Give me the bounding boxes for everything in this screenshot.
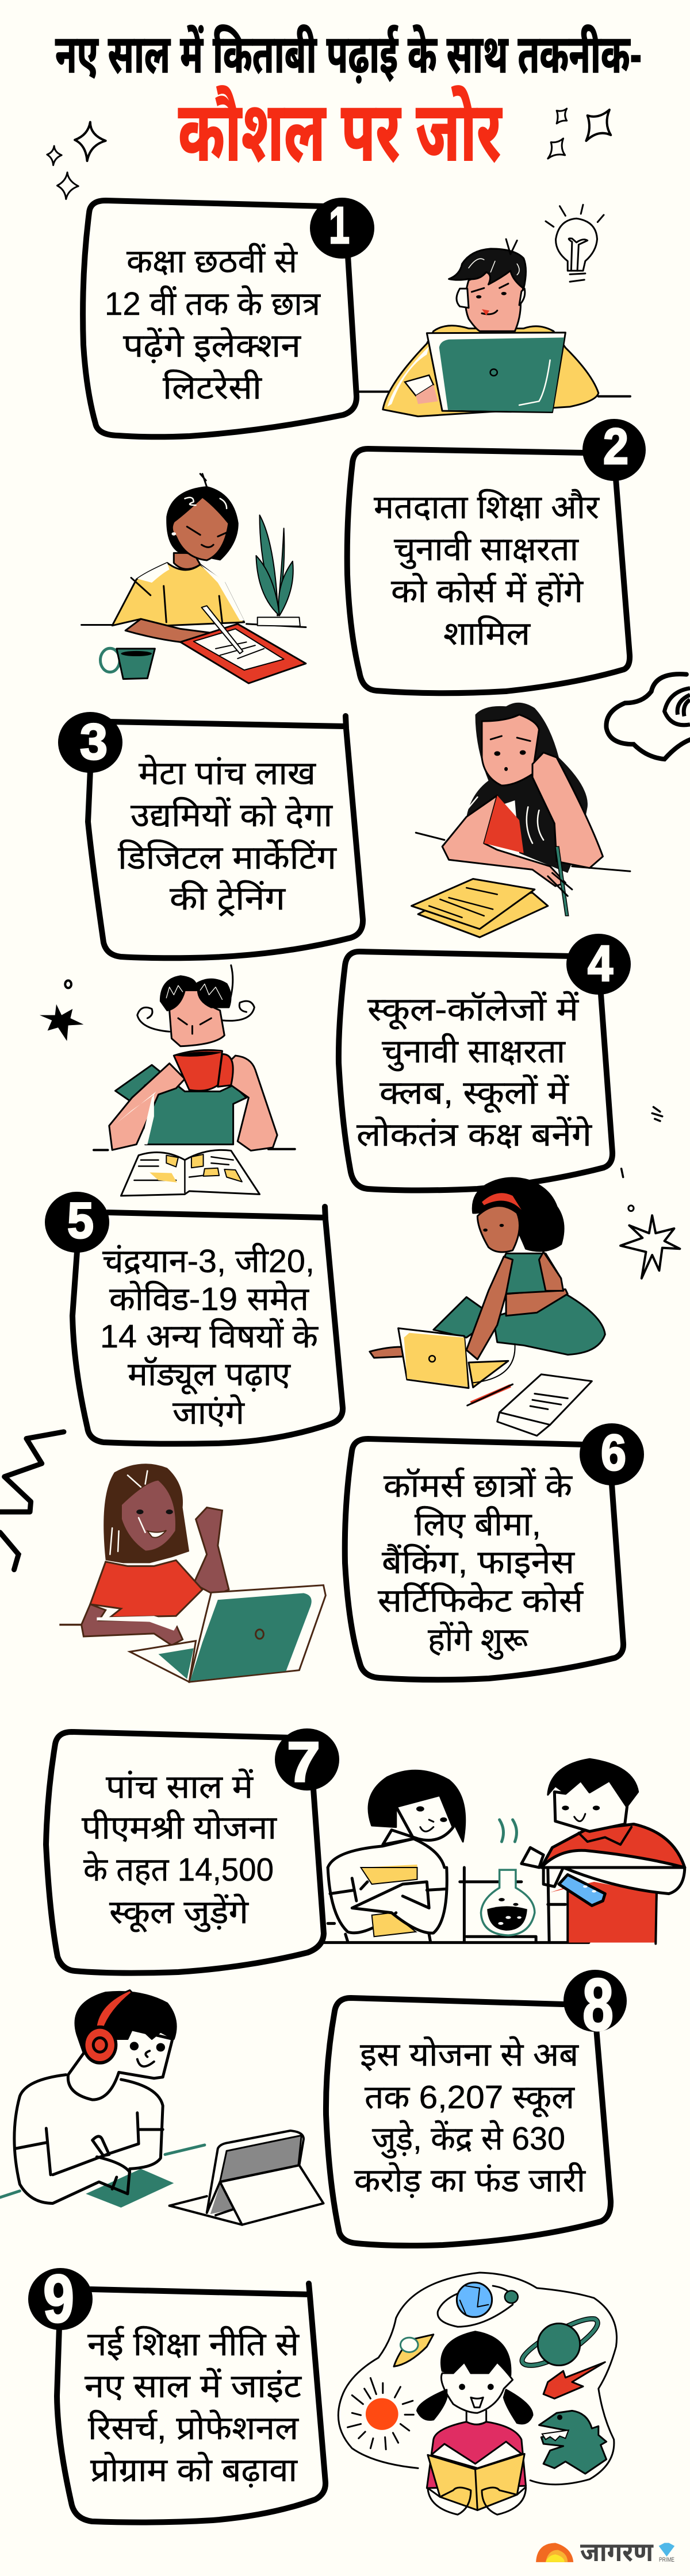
icon: sun <box>348 2378 413 2450</box>
icon: dinosaur <box>539 2411 607 2474</box>
card 1 text: पढ़ेंगे इलेक्शन <box>123 327 301 364</box>
illustration: girl raising hand with green laptop <box>59 1464 325 1682</box>
card 6 text: लिए बीमा, <box>415 1505 541 1543</box>
card 5 text: मॉड्यूल पढ़ाए <box>128 1356 292 1395</box>
card 9 text: रिसर्च, प्रोफेशनल <box>88 2409 299 2447</box>
card 3 text <box>118 754 337 917</box>
illustration: woman thinking with papers <box>412 703 630 937</box>
number badge 6: 6 <box>601 1424 626 1481</box>
panel: card 3 <box>58 712 363 958</box>
decorative sparkles right <box>548 109 611 159</box>
card 2 text: मतदाता शिक्षा और <box>374 488 600 526</box>
card 8 text: तक 6,207 स्कूल <box>365 2079 575 2118</box>
card 9 text: नए साल में जाइंट <box>85 2367 302 2405</box>
title <box>55 25 642 178</box>
card 3 text: डिजिटल मार्केटिंग <box>118 839 337 876</box>
icon: green laptop <box>130 1585 325 1682</box>
card 4 text: लोकतंत्र कक्ष बनेंगे <box>356 1116 592 1153</box>
card 5 text: कोविड-19 समेत <box>109 1280 310 1318</box>
number badge 9: 9 <box>43 2261 74 2337</box>
card 3 text: मेटा पांच लाख <box>139 754 316 792</box>
number badge 6 <box>580 1423 644 1485</box>
icon: test tube <box>559 1874 605 1905</box>
illustration: woman writing on tablet with plant and cup <box>82 474 306 683</box>
card 5 text: चंद्रयान-3, जी20, <box>102 1242 315 1280</box>
card 4 text: चुनावी साक्षरता <box>382 1033 566 1072</box>
title line 2: कौशल पर जोर <box>178 85 503 178</box>
card 8 text: जुड़े, केंद्र से 630 <box>372 2120 565 2159</box>
card 4 text: स्कूल-कॉलेजों में <box>367 991 579 1030</box>
card 6 text: कॉमर्स छात्रों के <box>384 1467 573 1504</box>
card 3 text: उद्यमियों को देगा <box>131 796 333 834</box>
panel: card 4 <box>339 934 631 1191</box>
steam curls <box>137 1001 254 1031</box>
icon: pencil and notebook <box>467 1374 592 1436</box>
number badge 8: 8 <box>582 1964 614 2046</box>
number badge 4: 4 <box>588 935 613 992</box>
illustration: woman with curly hair on laptop <box>370 1178 605 1436</box>
number badge 9 <box>28 2261 93 2337</box>
card 5 text: जाएंगे <box>172 1394 245 1431</box>
card 6 text: बैंकिंग, फाइनेस <box>382 1543 576 1581</box>
icon: ufo <box>394 2335 434 2366</box>
decorative sparkles left <box>47 122 106 199</box>
icon: flask <box>481 1870 535 1935</box>
number badge 7 <box>275 1728 339 1793</box>
card 7 text: स्कूल जुड़ेंगे <box>109 1893 249 1933</box>
icon: saturn <box>522 2319 597 2366</box>
panel: card 1 <box>83 197 374 437</box>
card 7 text: के तहत 14,500 <box>83 1851 274 1888</box>
number badge 3: 3 <box>80 713 108 770</box>
card 6 text <box>378 1467 584 1660</box>
card 1 text <box>105 242 321 406</box>
illustration: man sipping from red cup with book <box>94 965 295 1196</box>
icon: lightbulb <box>546 205 604 282</box>
card 7 text: पांच साल में <box>106 1768 254 1805</box>
number badge 3 <box>58 712 122 773</box>
panel: card 2 <box>347 418 646 693</box>
icon: yellow laptop <box>398 1328 508 1388</box>
panel: card 5 <box>45 1192 343 1444</box>
card 9 text: नई शिक्षा नीति से <box>87 2325 300 2363</box>
card 8 text: इस योजना से अब <box>360 2036 580 2073</box>
panel: card 9 <box>28 2261 325 2523</box>
card 2 text: चुनावी साक्षरता <box>394 530 579 569</box>
decorative stars left of man <box>40 980 83 1041</box>
number badge 2: 2 <box>603 418 628 475</box>
number badge 5: 5 <box>67 1192 94 1249</box>
logo: Jagran Prime: जागरण <box>580 2537 654 2567</box>
card 4 text: क्लब, स्कूलों में <box>379 1074 569 1114</box>
card 2 text: को कोर्स में होंगे <box>391 572 584 610</box>
icon: open book <box>121 1150 260 1196</box>
illustration: two students with flask <box>323 1759 685 1944</box>
card 8 text: करोड़ का फंड जारी <box>354 2162 586 2199</box>
illustration: boy with headphones and tablet <box>0 1990 323 2225</box>
decorative scribble left <box>0 1432 64 1570</box>
number badge 1: 1 <box>329 197 350 255</box>
card 9 text: प्रोग्राम को बढ़ावा <box>90 2451 298 2489</box>
illustration: girl reading with imagination bubble <box>338 2273 617 2515</box>
number badge 2 <box>582 418 646 481</box>
illustration: student at laptop with lightbulb <box>359 205 630 417</box>
card 6 text: होंगे शुरू <box>428 1621 529 1660</box>
panel: card 8 <box>326 1964 627 2246</box>
number badge 4 <box>566 934 631 995</box>
card 4 text <box>356 991 592 1153</box>
icon: comet <box>543 2362 605 2398</box>
card 1 text: लिटरेसी <box>163 369 262 406</box>
decorative doodle: scribble cloud <box>606 674 690 759</box>
number badge 1 <box>310 197 374 259</box>
card 1 text: कक्षा छठवीं से <box>126 242 298 280</box>
decorative marks right <box>620 1107 680 1279</box>
card 2 text <box>374 488 600 652</box>
number badge 8 <box>564 1964 627 2046</box>
girl figure <box>417 2332 532 2515</box>
number badge 5 <box>45 1192 109 1253</box>
icon: tablet <box>170 2131 323 2225</box>
card 3 text: की ट्रेनिंग <box>170 880 286 917</box>
logo: Jagran Prime <box>536 2537 674 2567</box>
card 9 text <box>85 2325 302 2489</box>
card 5 text: 14 अन्य विषयों के <box>100 1318 319 1355</box>
icon: cup <box>100 648 155 679</box>
panel: card 7 <box>46 1728 339 1973</box>
icon: plant <box>256 515 300 626</box>
icon: earth planet <box>438 2282 518 2327</box>
card 6 text: सर्टिफिकेट कोर्स <box>378 1582 584 1619</box>
card 7 text <box>82 1768 277 1933</box>
card 5 text <box>100 1242 319 1431</box>
number badge 7: 7 <box>287 1730 320 1793</box>
panel: card 6 <box>345 1423 644 1680</box>
icon: papers <box>412 846 572 937</box>
card 2 text: शामिल <box>443 615 531 652</box>
card 8 text <box>354 2036 586 2199</box>
card 1 text: 12 वीं तक के छात्र <box>105 285 321 322</box>
logo: Jagran Prime: PRIME <box>659 2556 674 2563</box>
card 7 text: पीएमश्री योजना <box>82 1809 277 1846</box>
